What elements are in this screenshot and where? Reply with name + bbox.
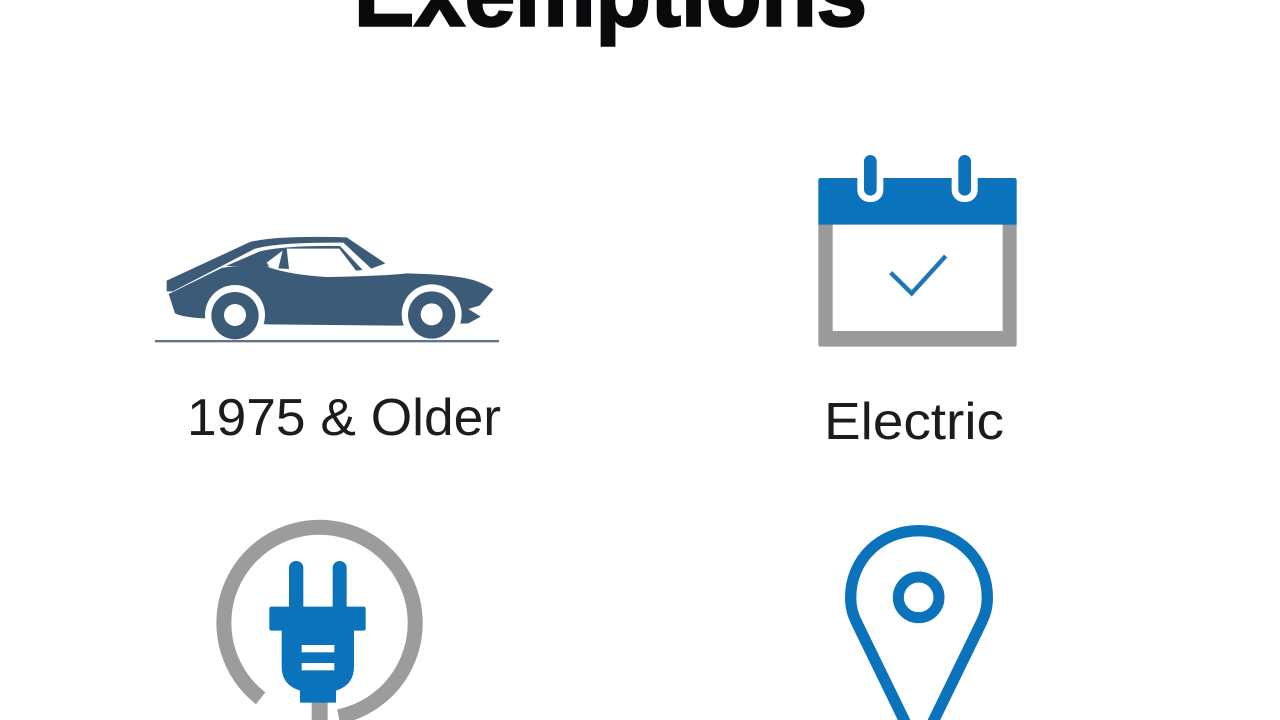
icon: classic car	[155, 237, 499, 345]
panel: location	[851, 531, 987, 720]
icon: electric plug in ring	[224, 527, 415, 720]
panel: electric	[818, 155, 1017, 451]
icon: calendar with check	[818, 155, 1017, 347]
icon: map pin	[851, 531, 987, 720]
panel: 1975 and older	[155, 237, 501, 447]
label: 1975 & Older: 1975 & Older	[187, 389, 501, 447]
panel: plug-in	[224, 527, 415, 720]
label: Electric: Electric	[824, 393, 1004, 451]
